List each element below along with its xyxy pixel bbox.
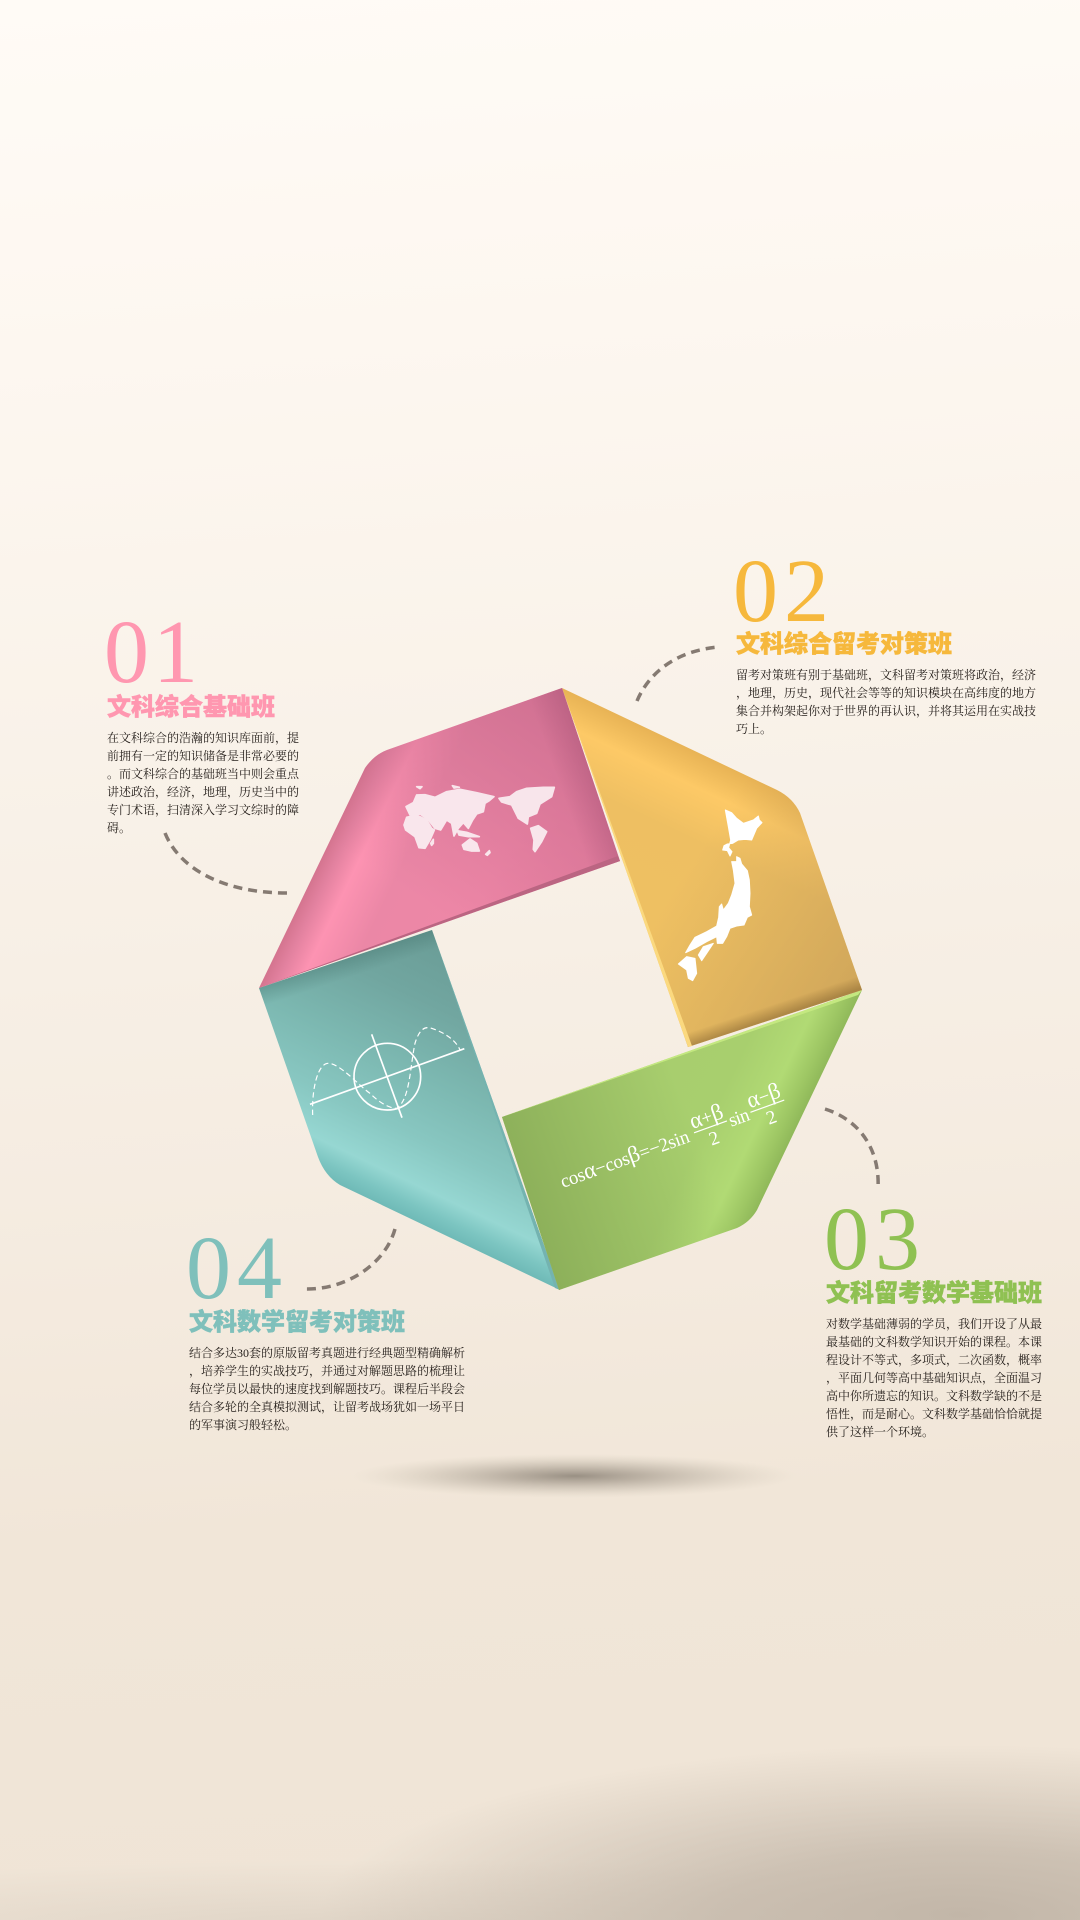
- text 02: ，地理，历史，现代社会等等的知识模块在高纬度的地方: [736, 686, 1036, 700]
- text 03: 供了这样一个环境。: [826, 1425, 934, 1439]
- text 03: ，平面几何等高中基础知识点，全面温习: [826, 1371, 1042, 1385]
- text 03: 最基础的文科数学知识开始的课程。本课: [826, 1335, 1042, 1349]
- icon: trig formula: 2: [764, 1106, 780, 1129]
- text 01: 。而文科综合的基础班当中则会重点: [107, 767, 299, 781]
- panel: 03: [824, 1190, 1042, 1439]
- number 03: 03: [824, 1190, 926, 1289]
- ribbon segment: teal: [259, 930, 560, 1290]
- icon: trig formula: [552, 1077, 792, 1203]
- text 04: ，培养学生的实战技巧，并通过对解题思路的梳理让: [189, 1364, 465, 1378]
- panel: 04: [186, 1219, 465, 1432]
- text 03: 对数学基础薄弱的学员，我们开设了从最: [826, 1317, 1042, 1331]
- text 04: 每位学员以最快的速度找到解题技巧。课程后半段会: [189, 1382, 465, 1396]
- text 03: 高中你所遗忘的知识。文科数学缺的不是: [826, 1389, 1042, 1403]
- heading 04: 文科数学留考对策班: [189, 1309, 405, 1336]
- floor shadow: [353, 1454, 797, 1498]
- icon: world map: [404, 786, 554, 855]
- arrow: dashed connector 04: [306, 1228, 397, 1291]
- number 02: 02: [733, 542, 835, 641]
- ribbon segment: pink: [259, 688, 620, 988]
- ribbon segment: green: [502, 990, 862, 1290]
- ribbon segment: gold: [562, 688, 862, 1047]
- icon: sine graph: [310, 1028, 464, 1118]
- heading 01: 文科综合基础班: [107, 694, 275, 721]
- text 01: 专门术语，扫清深入学习文综时的障: [107, 803, 299, 817]
- arrow: dashed connector 02: [635, 646, 715, 702]
- arrow: dashed connector 03: [824, 1107, 880, 1184]
- text 01: 前拥有一定的知识储备是非常必要的: [107, 749, 299, 763]
- panel: 02: [733, 542, 1036, 736]
- text 03: 悟性，而是耐心。文科数学基础恰恰就提: [826, 1407, 1042, 1421]
- text 02: 留考对策班有别于基础班，文科留考对策班将政治，经济: [736, 668, 1036, 682]
- text 04: [189, 1346, 465, 1432]
- text 04: 结合多轮的全真模拟测试，让留考战场犹如一场平日: [189, 1400, 465, 1414]
- icon: trig formula: α−β: [743, 1078, 784, 1113]
- icon: trig formula: α+β: [686, 1099, 727, 1134]
- text 03: 程设计不等式，多项式，二次函数，概率: [826, 1353, 1042, 1367]
- text 02: 巧上。: [736, 722, 772, 736]
- number 01: 01: [104, 603, 202, 702]
- heading 03: 文科留考数学基础班: [826, 1280, 1042, 1307]
- text 01: [107, 731, 299, 835]
- icon: Japan map: [678, 810, 762, 981]
- icon: trig formula: 2: [706, 1127, 722, 1150]
- icon: trig formula: sin: [726, 1104, 753, 1131]
- text 03: [826, 1317, 1042, 1439]
- text 02: 集合并构架起你对于世界的再认识，并将其运用在实战技: [736, 704, 1036, 718]
- heading 02: 文科综合留考对策班: [736, 631, 952, 658]
- number 04: 04: [186, 1219, 288, 1318]
- text 01: 碍。: [107, 821, 131, 835]
- text 02: [736, 668, 1036, 736]
- text 04: 结合多达30套的原版留考真题进行经典题型精确解析: [189, 1346, 465, 1360]
- text 01: 在文科综合的浩瀚的知识库面前，提: [107, 731, 299, 745]
- text 04: 的军事演习般轻松。: [189, 1418, 297, 1432]
- panel: 01: [104, 603, 299, 835]
- text 01: 讲述政治，经济，地理，历史当中的: [107, 785, 299, 799]
- arrow: dashed connector 01: [163, 832, 287, 895]
- icon: trig formula: cosα−cosβ=−2sin: [556, 1123, 693, 1193]
